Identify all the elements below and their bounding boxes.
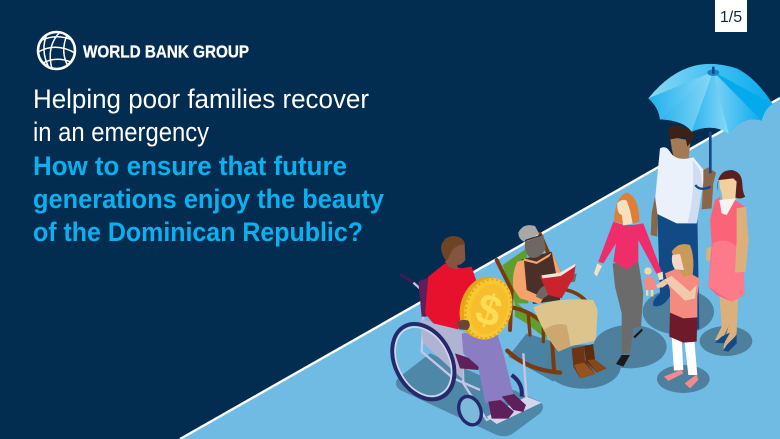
woman reading [513, 225, 607, 378]
floor shadows [593, 289, 752, 393]
wheelchair back and frame [413, 283, 527, 420]
doll [644, 267, 657, 297]
subtitle question: How to ensure that future [33, 151, 347, 181]
seat [420, 318, 463, 380]
title [33, 84, 369, 147]
family standing with umbrella [593, 125, 752, 393]
umbrella [648, 64, 773, 173]
red shirt [425, 263, 478, 329]
white diagonal edge [180, 98, 780, 439]
man [651, 125, 716, 330]
diagonal light blue floor [180, 98, 780, 439]
person: man in wheelchair and woman in rocking chair [380, 225, 621, 436]
title: in an emergency [33, 117, 210, 147]
canopy [648, 64, 773, 134]
large wheel [380, 313, 467, 410]
wheelchair handle [400, 274, 413, 283]
coin [452, 270, 520, 346]
umbrella tip [712, 67, 715, 74]
logo: World Bank Group [38, 32, 249, 69]
umbrella hook [695, 185, 711, 189]
icon: globe [38, 32, 75, 69]
subtitle question: generations enjoy the beauty [33, 184, 384, 214]
rocking chair floor ellipse [546, 345, 621, 389]
front caster [455, 393, 485, 428]
coin: $ [470, 284, 508, 337]
rear right wheel [512, 375, 522, 397]
umbrella shaft [709, 132, 712, 173]
title: Helping poor families recover [33, 84, 369, 114]
neck and head [445, 244, 465, 270]
logo: World Bank Group: WORLD BANK GROUP [83, 42, 249, 62]
girl [644, 244, 699, 388]
right woman [706, 170, 749, 352]
shoes [488, 400, 514, 419]
page number badge [715, 0, 747, 32]
hand [457, 320, 470, 330]
man's legs [462, 332, 514, 404]
rocking chair shadow [508, 333, 580, 382]
wheelchair shadow [396, 353, 543, 436]
rocking chair [497, 234, 600, 373]
woman in pink [594, 193, 662, 367]
page number badge: 1/5 [720, 9, 742, 26]
subtitle question [33, 151, 384, 247]
subtitle question: of the Dominican Republic? [33, 217, 363, 247]
illustration: group of people [380, 64, 773, 436]
footrest [487, 397, 542, 424]
